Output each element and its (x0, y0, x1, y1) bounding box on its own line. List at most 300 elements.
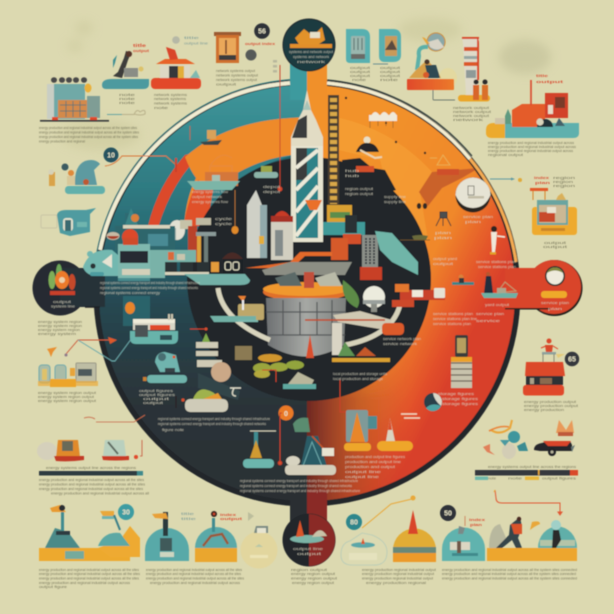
teal label bottom (243, 459, 274, 468)
bottom left items: energy systems output line across the regions (46, 466, 137, 470)
bottom circle badge: output (297, 552, 321, 556)
red box (102, 440, 129, 460)
row captions: energy production and regional industrial output across all the sites (146, 572, 241, 576)
red pot (106, 229, 138, 245)
frame caption: network systems output (216, 74, 258, 78)
truck caption (488, 141, 576, 157)
small house (125, 208, 139, 225)
robot (541, 338, 565, 362)
orange frame (214, 32, 241, 63)
card captions: output (350, 74, 370, 78)
bottom left items: energy production and regional industrial output across all the sites (39, 478, 144, 482)
grey title: output line (184, 42, 208, 46)
row captions: energy production and regional industrial output across all the sites (39, 576, 139, 580)
top circle badge: systems and network (293, 55, 329, 59)
badge 65: 65 (568, 356, 576, 364)
small arrow (248, 512, 254, 521)
orange box (331, 238, 348, 260)
rocket body (291, 137, 323, 242)
card captions: note (380, 78, 399, 82)
truck label: output (536, 79, 564, 84)
white tents (369, 112, 397, 128)
small chair (556, 193, 566, 200)
captions: energy production regional industrial output (362, 568, 436, 572)
red connector (105, 156, 175, 166)
badge 50: 50 (444, 510, 452, 518)
bottom left items (37, 440, 149, 496)
small green tray (254, 166, 278, 178)
factory connector (107, 110, 145, 115)
lunar lander (436, 212, 451, 226)
red label (407, 79, 454, 90)
top right cards (346, 29, 579, 480)
inner black disc (187, 157, 431, 401)
orange frame label: output index (245, 41, 276, 46)
inner text blocks: hub (345, 174, 360, 178)
left lobe content: output (53, 300, 71, 304)
factory caption: energy production and regional industrial output across all the system sites (39, 126, 137, 130)
orange label (220, 513, 244, 521)
bottom row right (341, 490, 577, 585)
green leaves (343, 280, 359, 308)
truck caption: regional output (488, 153, 523, 157)
card connector (373, 63, 388, 65)
red house caption: note (154, 106, 168, 110)
teal mailbox (41, 208, 96, 236)
inner text blocks: service stations plan (476, 260, 516, 264)
orange clock (55, 271, 69, 289)
figure caption (119, 93, 136, 105)
inner text blocks: depot (263, 185, 280, 189)
inner text blocks: production and output line (345, 460, 401, 464)
white rim arc left (100, 83, 290, 250)
legend bar: note (488, 476, 496, 480)
grey label: title (181, 512, 195, 516)
inner text blocks: yard output (485, 303, 509, 307)
inner text blocks: service stations plan line (433, 317, 477, 321)
legend bar (475, 465, 578, 480)
spiral ring left (218, 288, 270, 340)
grey title (172, 36, 208, 46)
left dark note: output figures (139, 393, 176, 397)
figure label: title (133, 43, 147, 48)
squiggle connector (84, 415, 145, 422)
red base (50, 291, 75, 295)
globe scene (409, 32, 457, 88)
jars caption: energy system region output (38, 395, 94, 399)
scoreboard (222, 252, 243, 273)
white dashes (401, 414, 420, 418)
captions: energy production and regional industrial output across all the system sites connected (442, 572, 576, 576)
inner text blocks: service network plan (383, 337, 421, 341)
legend bar: note (508, 476, 522, 480)
grey label (181, 512, 197, 521)
right lobe content: plan (548, 307, 563, 311)
row captions: output figure (39, 585, 67, 589)
dark gear (246, 50, 256, 60)
tower caption (453, 106, 491, 122)
teal dome (442, 526, 485, 561)
inner text blocks: local production and storage units (333, 372, 387, 376)
dark teal ball (424, 393, 442, 411)
yellow line (362, 496, 415, 528)
small yellow tent (430, 155, 450, 165)
crane right (98, 511, 130, 546)
figure with yard (481, 272, 518, 298)
inner text blocks: supply line (384, 200, 406, 204)
picture card (532, 200, 577, 235)
top circle badge: systems and network output (289, 50, 333, 54)
red arc (148, 154, 190, 226)
inner text blocks: energy systems flow (192, 190, 229, 194)
yellow strip (39, 526, 140, 561)
tower caption: network output (453, 106, 489, 110)
black wedge top (342, 158, 396, 205)
right lobe content: service plan (541, 301, 569, 305)
small figures on teal (168, 252, 185, 260)
left caption: energy system region (38, 328, 80, 332)
bottom row left (39, 504, 337, 589)
picture caption: output (543, 245, 567, 249)
teal dome (145, 512, 189, 561)
main circular diagram (32, 60, 582, 525)
red building caption (524, 400, 578, 412)
red house caption: network systems (154, 97, 187, 101)
white cylinder (169, 220, 185, 240)
green islands (235, 346, 304, 378)
bottom connector stem (290, 490, 327, 525)
row captions: energy production and regional industrial output across (39, 581, 130, 585)
orange machine icon (290, 27, 332, 48)
stack (190, 328, 222, 367)
teal card 1 (346, 29, 370, 63)
brown wedge (419, 168, 479, 206)
striped tower (458, 37, 490, 102)
zigzag chart lines (64, 337, 132, 361)
spiral ring right (345, 305, 400, 345)
white label with greens (185, 389, 228, 412)
dark counters (165, 262, 219, 275)
inner text blocks: figure note (162, 428, 184, 432)
inner text blocks: production and output line figures (345, 455, 406, 459)
olive ship (400, 235, 430, 240)
inner text blocks: service (476, 319, 501, 323)
red needle on teal (175, 158, 177, 172)
light orange rim (470, 159, 516, 262)
yellow label left (344, 443, 371, 451)
orange rocket card (346, 410, 377, 442)
orange arc (184, 117, 307, 226)
row captions: energy production and regional industrial output across (150, 581, 240, 585)
badge 50 (440, 505, 456, 521)
red building caption: energy production output (524, 400, 576, 404)
left dark note: output (143, 397, 169, 401)
card captions: note (352, 78, 366, 82)
bird arcs (483, 420, 528, 459)
left dark note: output figures (139, 389, 174, 393)
bottom middle caption: energy region output (292, 581, 334, 585)
teal card 2 (379, 29, 401, 62)
grey block (362, 235, 378, 268)
oil tower (286, 436, 334, 470)
bottom middle caption: energy region output (291, 572, 335, 576)
small bird figure (556, 420, 574, 436)
orange badge: 0 (284, 411, 288, 418)
inner text blocks: regional systems connect energy transport and industry through shared infrastructure (100, 281, 200, 285)
orange walkway (245, 252, 332, 268)
red needle connector (278, 65, 282, 191)
left lobe (32, 260, 105, 316)
legend bar: output figures (542, 476, 577, 480)
boat on teal (190, 126, 222, 145)
figure caption: note (119, 97, 136, 101)
orange sign (530, 176, 550, 200)
rocket tip (291, 90, 323, 146)
badge 30 (118, 504, 134, 520)
red truck (486, 80, 579, 138)
captions: energy production regional industrial output (362, 576, 433, 580)
red house caption: network systems (154, 102, 188, 106)
row captions: energy production and regional industrial output across all the sites (146, 576, 244, 580)
left dark note (139, 389, 176, 405)
teal platform (323, 215, 365, 235)
card captions: output (350, 70, 370, 74)
orange badge (278, 406, 294, 420)
red tick (176, 396, 185, 408)
truck label (536, 73, 564, 84)
small figures (48, 169, 89, 186)
left caption: energy system (38, 332, 77, 336)
dark screen (118, 244, 150, 281)
left caption: energy system region (38, 320, 82, 324)
inner text blocks: regional systems connect energy transport and industry through shared networks (158, 422, 266, 426)
red rail (305, 319, 385, 321)
yellow bulb (232, 190, 238, 234)
jars caption (38, 391, 96, 403)
red house platform (151, 47, 201, 89)
pale block (180, 218, 211, 229)
inner text blocks: local production and storage (333, 377, 383, 381)
badge 56: 56 (258, 28, 266, 36)
helmet blob (75, 160, 100, 185)
bottom left items: energy production and regional industrial output across all (51, 492, 149, 496)
inner text blocks: cycle (215, 222, 233, 226)
disc quadrants (90, 70, 527, 510)
right note: region (553, 180, 573, 184)
inner text blocks: output line (345, 475, 380, 479)
whitish label (285, 465, 336, 475)
red label (343, 234, 361, 244)
bottom middle caption: region output (291, 568, 327, 572)
orange sign: plan (535, 181, 550, 185)
truck caption: energy production and regional industrial output across (488, 145, 576, 149)
tower caption: network (453, 118, 484, 122)
inner text blocks: hub (345, 169, 360, 173)
teal yard (452, 274, 474, 285)
hut on teal (210, 296, 264, 322)
factory caption: energy production and regional (39, 140, 85, 144)
top-left factory (40, 77, 109, 122)
orange eye (368, 176, 386, 194)
right lobe content (541, 266, 569, 311)
green box (327, 205, 352, 223)
row captions (39, 568, 244, 589)
left inner machines (83, 65, 490, 475)
pale dome (240, 526, 278, 568)
figure caption: note (119, 101, 136, 105)
inner text blocks: plan (465, 220, 482, 224)
yellow label right (377, 441, 413, 451)
left lobe content (48, 264, 76, 308)
right orange huts (392, 284, 414, 307)
thin rim line left (97, 80, 290, 252)
row captions: energy production and regional industrial output across all the sites (39, 568, 139, 572)
white batter figure (490, 226, 505, 254)
frame caption: network systems output (216, 69, 255, 73)
roof domes (51, 77, 87, 83)
long bar (39, 471, 143, 476)
figure label (133, 43, 150, 53)
card captions: output (380, 66, 400, 70)
right note (553, 176, 576, 188)
small red label: index (469, 518, 485, 522)
orange label: index (220, 513, 236, 517)
inner text blocks: output network (192, 195, 223, 199)
gear (62, 164, 68, 170)
grey walkway (262, 262, 352, 275)
orange sign: index (534, 176, 549, 180)
right note: region (553, 176, 576, 180)
red dot (134, 440, 142, 459)
grey drum (266, 298, 346, 358)
tower caption: network output (453, 114, 489, 118)
badge 80 (346, 514, 362, 530)
badge 80: 80 (350, 520, 358, 526)
card captions (350, 66, 400, 82)
red label right (437, 169, 459, 175)
cabin with red stripe (130, 314, 178, 344)
card captions: output (350, 66, 370, 70)
tower caption: network output (453, 110, 491, 114)
cone dome (393, 510, 436, 562)
small orange lamp (125, 302, 135, 314)
crane left (45, 505, 80, 548)
figure label: output (133, 49, 150, 53)
egg (37, 442, 57, 460)
red building caption: energy production output (524, 404, 578, 408)
red label connector (433, 90, 455, 100)
white sphere (363, 286, 385, 312)
teal tray (184, 274, 250, 285)
outline dome (341, 533, 387, 565)
bottom circle badge: output line (293, 547, 323, 551)
red top lighthouse (271, 211, 293, 260)
globe (545, 266, 565, 286)
white strip label (400, 288, 445, 300)
captions: energy production and regional industrial output across all the system sites connected (442, 568, 577, 572)
captions (362, 568, 577, 585)
card captions: output (380, 70, 400, 74)
left teal label (143, 375, 187, 383)
teal ramp (375, 231, 418, 275)
green trees (48, 264, 76, 290)
right note: region (553, 184, 576, 188)
captions: energy production regional industrial output (362, 572, 434, 576)
center tower group (218, 90, 445, 389)
red building (523, 362, 565, 396)
frame caption (216, 69, 258, 86)
dark car (534, 441, 575, 456)
teal label (65, 186, 105, 194)
background smudges (60, 18, 551, 150)
inner text blocks (100, 169, 516, 493)
captions: energy production and regional industrial output across all the system sites connected (442, 576, 577, 580)
figure caption: note (119, 93, 136, 97)
badge 10: 10 (107, 152, 115, 160)
red block (360, 267, 382, 280)
sitting figure (102, 51, 149, 89)
factory caption: energy production and regional industrial output across all the system sites (39, 135, 138, 139)
jars (38, 363, 98, 387)
orange bird (47, 347, 57, 357)
vertical note (273, 60, 277, 72)
small black drops (345, 97, 427, 209)
bottom middle caption (291, 568, 337, 585)
small red label (465, 516, 485, 527)
inner text blocks: region output (345, 192, 373, 196)
bottom middle caption: energy region output (291, 576, 337, 580)
lighter orange band (340, 118, 432, 239)
orange arc red tail (184, 180, 213, 226)
inner text blocks: service stations plan (433, 312, 473, 316)
left caption: energy system region (38, 324, 82, 328)
left dark note: output (143, 401, 163, 405)
grey skyscraper (247, 190, 267, 258)
arrow connector (490, 178, 522, 182)
inner text blocks: region output (345, 187, 373, 191)
factory caption (39, 126, 139, 144)
jars caption: energy system region output (38, 391, 96, 395)
inner text blocks: output (433, 262, 453, 266)
inner text blocks: regional systems connect energy transport and industry through shared infrastructure (240, 479, 358, 483)
inner text blocks: supply line (384, 195, 406, 199)
stripe stack (451, 335, 472, 388)
white sphere right (456, 178, 490, 212)
bottom left items: energy production and regional industrial output across all the sites (39, 487, 143, 491)
pattern strip (328, 95, 339, 205)
pale teal panel (123, 296, 150, 326)
inner text blocks: plan (435, 231, 452, 235)
left lobe content: system line (51, 304, 75, 308)
row captions: energy production and regional industrial output across all the sites (39, 572, 140, 576)
top circle badge (282, 18, 336, 72)
inner text blocks: service plan (463, 215, 493, 219)
red building caption: energy production (524, 408, 564, 412)
yellow label (541, 291, 567, 298)
orange tag on tower (305, 200, 322, 210)
red tower (188, 226, 216, 262)
small red label: plan (470, 523, 482, 527)
orange pod (382, 323, 404, 335)
inner text blocks: output yard (433, 257, 457, 261)
inner text blocks: storage figures (442, 402, 479, 406)
teal upper plant (115, 225, 175, 250)
dark tower (250, 431, 276, 458)
inner text blocks: regional systems connect energy transport and industry through shared networks (240, 484, 352, 488)
row captions: energy production and regional industrial output across all the sites (146, 568, 242, 572)
picture caption: output (544, 241, 566, 245)
grey label: title (181, 517, 197, 521)
